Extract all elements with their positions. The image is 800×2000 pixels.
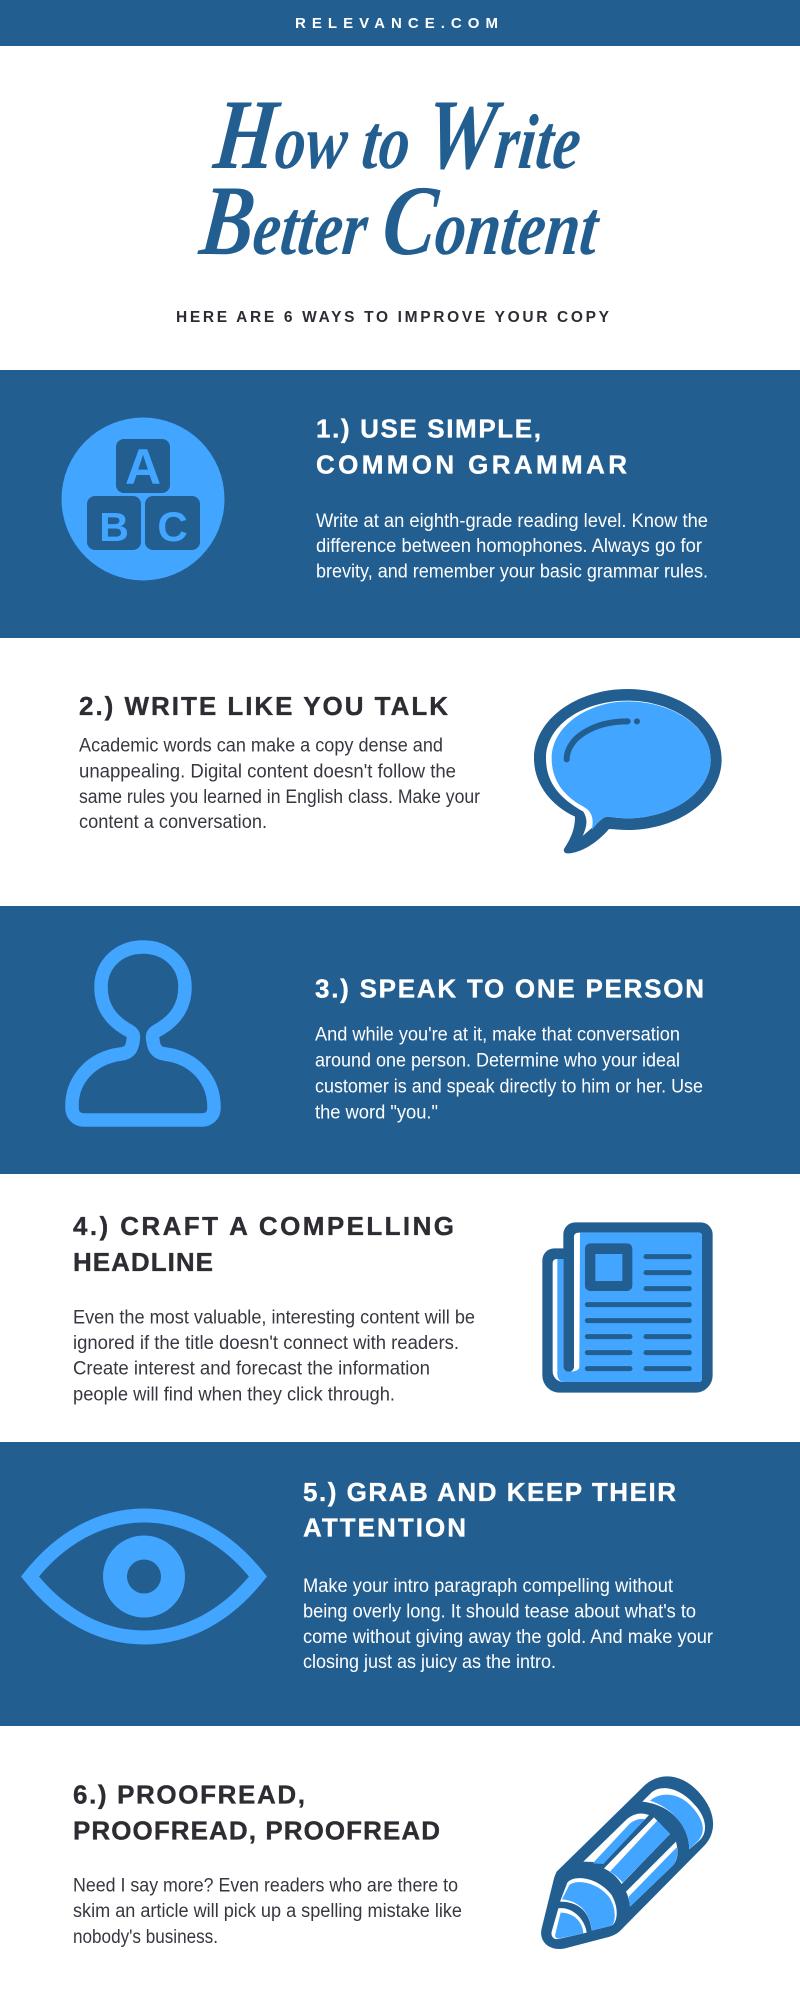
- heading: tip 1: 1.) USE SIMPLE,: [316, 414, 541, 444]
- text: tip 5 body: Make your intro paragraph compelling without: [303, 1576, 674, 1597]
- title: How to Write: [209, 79, 587, 190]
- subtitle: HERE ARE 6 WAYS TO IMPROVE YOUR COPY: [176, 309, 610, 326]
- text: tip 6 body: Need I say more? Even readers who are there to: [73, 1876, 458, 1896]
- heading: tip 4: HEADLINE: [73, 1247, 213, 1277]
- icon: abc blocks: A: [125, 439, 161, 495]
- text: tip 1 body: [316, 511, 708, 582]
- text: tip 4 body: Create interest and forecast the information: [73, 1358, 430, 1380]
- heading: tip 1: [316, 414, 627, 480]
- panel: tip 3 speak to one person: [0, 906, 800, 1174]
- text: tip 1 body: difference between homophones. Always go for: [316, 536, 703, 557]
- text: tip 1 body: Write at an eighth-grade reading level. Know the: [316, 511, 708, 532]
- text: tip 2 body: [79, 736, 481, 833]
- heading: tip 2: 2.) WRITE LIKE YOU TALK: [79, 691, 448, 721]
- text: tip 3 body: customer is and speak directly to him or her. Use: [315, 1076, 703, 1098]
- icon: eye: [30, 1516, 258, 1638]
- text: tip 4 body: [73, 1308, 475, 1406]
- top bar: relevance.com: RELEVANCE.COM: [295, 15, 498, 32]
- panel: tip 2 write like you talk: [79, 689, 722, 853]
- text: tip 5 body: being overly long. It should tease about what's to: [303, 1602, 696, 1622]
- panel: tip 5 grab and keep their attention: [0, 1442, 800, 1726]
- icon: pencil: [541, 1776, 713, 1949]
- text: tip 1 body: brevity, and remember your basic grammar rules.: [316, 562, 708, 582]
- text: tip 4 body: Even the most valuable, interesting content will be: [73, 1308, 475, 1328]
- heading: tip 6: PROOFREAD, PROOFREAD: [73, 1816, 440, 1846]
- title: Better Content: [195, 165, 606, 276]
- text: tip 3 body: [315, 1024, 703, 1124]
- text: tip 6 body: [73, 1876, 462, 1948]
- heading: tip 5: 5.) GRAB AND KEEP THEIR: [303, 1477, 676, 1507]
- heading: tip 6: 6.) PROOFREAD,: [73, 1780, 305, 1810]
- panel: tip 4 craft a compelling headline: [73, 1211, 713, 1406]
- title: [195, 79, 606, 276]
- heading: tip 5: [303, 1477, 676, 1542]
- text: tip 2 body: Academic words can make a copy dense and: [79, 736, 443, 756]
- text: tip 6 body: nobody's business.: [73, 1927, 218, 1948]
- heading: tip 5: ATTENTION: [303, 1512, 466, 1542]
- icon: newspaper: [542, 1222, 713, 1393]
- heading: tip 4: [73, 1211, 454, 1277]
- text: tip 2 body: same rules you learned in English class. Make your: [79, 787, 481, 808]
- icon: speech bubble: [534, 689, 722, 853]
- heading: tip 4: 4.) CRAFT A COMPELLING: [73, 1211, 454, 1241]
- heading: tip 3: 3.) SPEAK TO ONE PERSON: [315, 974, 704, 1004]
- text: tip 4 body: people will find when they click through.: [73, 1384, 395, 1406]
- heading: tip 1: COMMON GRAMMAR: [316, 450, 627, 480]
- text: tip 5 body: [303, 1576, 714, 1673]
- text: tip 3 body: the word "you.": [315, 1102, 438, 1124]
- heading: tip 6: [73, 1780, 440, 1846]
- text: tip 4 body: ignored if the title doesn't connect with readers.: [73, 1333, 459, 1354]
- text: tip 3 body: And while you're at it, make that conversation: [315, 1024, 680, 1046]
- icon: abc blocks: B: [99, 504, 129, 550]
- panel: tip 1 use simple common grammar: [0, 370, 800, 638]
- text: tip 5 body: closing just as juicy as the intro.: [303, 1652, 556, 1673]
- top bar: relevance.com: [0, 0, 800, 46]
- text: tip 2 body: unappealing. Digital content doesn't follow the: [79, 762, 456, 782]
- icon: person outline: [72, 947, 214, 1120]
- text: tip 6 body: skim an article will pick up a spelling mistake like: [73, 1901, 462, 1922]
- text: tip 5 body: come without giving away the gold. And make your: [303, 1627, 714, 1648]
- icon: abc blocks: C: [157, 503, 188, 550]
- icon: abc blocks: [62, 418, 224, 580]
- text: tip 3 body: around one person. Determine who your ideal: [315, 1050, 680, 1072]
- panel: tip 6 proofread: [73, 1776, 713, 1949]
- text: tip 2 body: content a conversation.: [79, 812, 267, 833]
